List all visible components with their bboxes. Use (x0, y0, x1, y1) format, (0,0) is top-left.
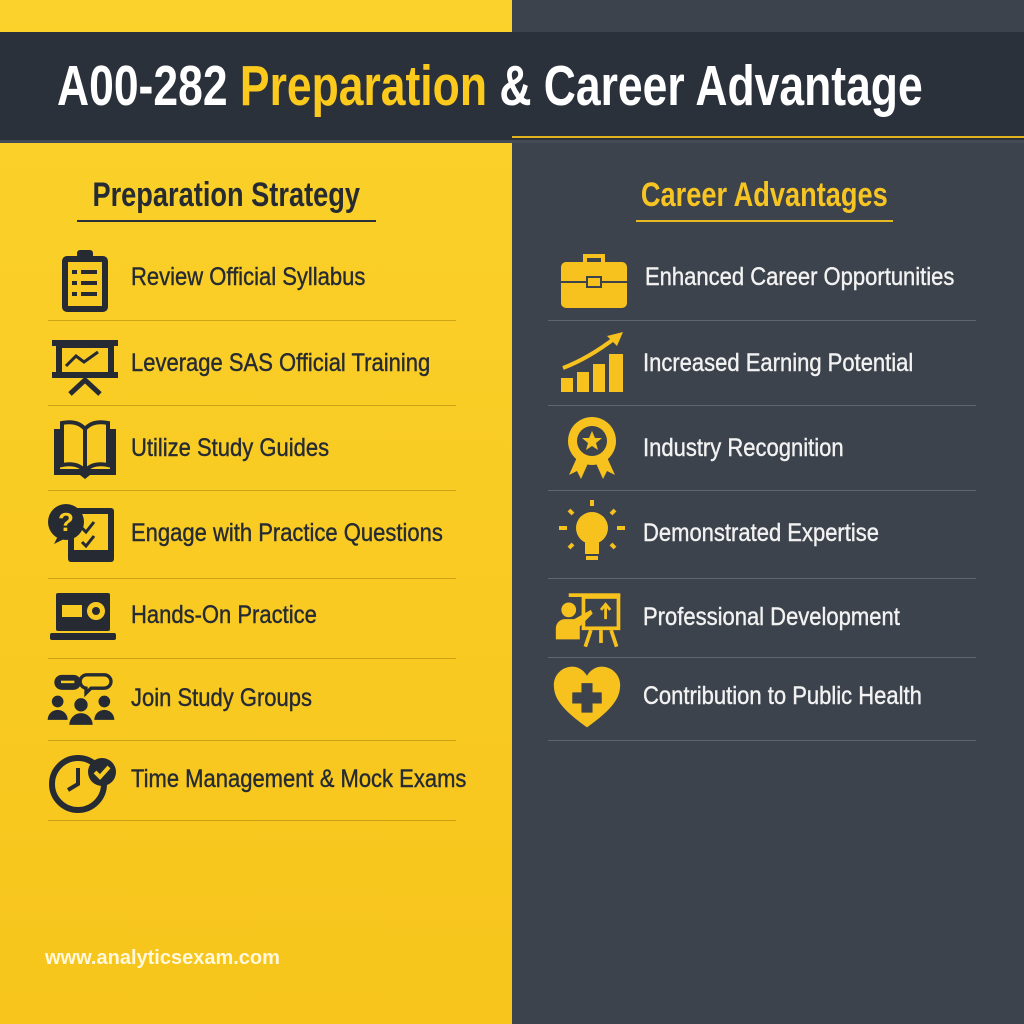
icon: award badge (568, 417, 616, 479)
text: study guides: Utilize Study Guides (131, 434, 329, 462)
panel: preparation strategy list (48, 250, 466, 821)
icon: laptop gear (50, 593, 116, 640)
text: leverage training: Leverage SAS Official Training (131, 349, 430, 377)
icon: heart cross (554, 666, 620, 728)
icon: clipboard (62, 250, 108, 312)
footer url: www.analyticsexam.com (45, 947, 280, 969)
text: industry recognition: Industry Recognition (643, 434, 844, 462)
icon: briefcase (561, 254, 627, 308)
text: expertise: Demonstrated Expertise (643, 519, 879, 547)
heading: career advantages: Career Advantages (641, 176, 888, 214)
text: career opportunities: Enhanced Career Opportunities (645, 263, 954, 291)
text: practice questions: Engage with Practice Questions (131, 519, 443, 547)
icon: open book (54, 420, 116, 479)
text: earning potential: Increased Earning Potential (643, 349, 913, 377)
title banner (0, 32, 1024, 143)
title: A00-282 Preparation & Career Advantage (57, 54, 923, 118)
text: professional development: Professional Development (643, 603, 900, 631)
text: public health: Contribution to Public Health (643, 682, 922, 710)
icon: practice questions (48, 504, 114, 562)
text: time management: Time Management & Mock Exams (131, 765, 466, 793)
icon: growth chart (561, 332, 623, 392)
heading: preparation strategy: Preparation Strategy (93, 176, 360, 214)
icon: clock check (49, 755, 116, 813)
icon: lightbulb (559, 500, 625, 560)
text: study groups: Join Study Groups (131, 684, 312, 712)
icon: study group (48, 673, 114, 725)
text: review syllabus: Review Official Syllabus (131, 263, 365, 291)
panel: career advantages list (548, 254, 976, 741)
icon: presentation board (52, 340, 118, 396)
text: hands-on: Hands-On Practice (131, 601, 317, 629)
icon: presenter (556, 593, 620, 648)
icon: practice questions: ? (58, 507, 74, 537)
